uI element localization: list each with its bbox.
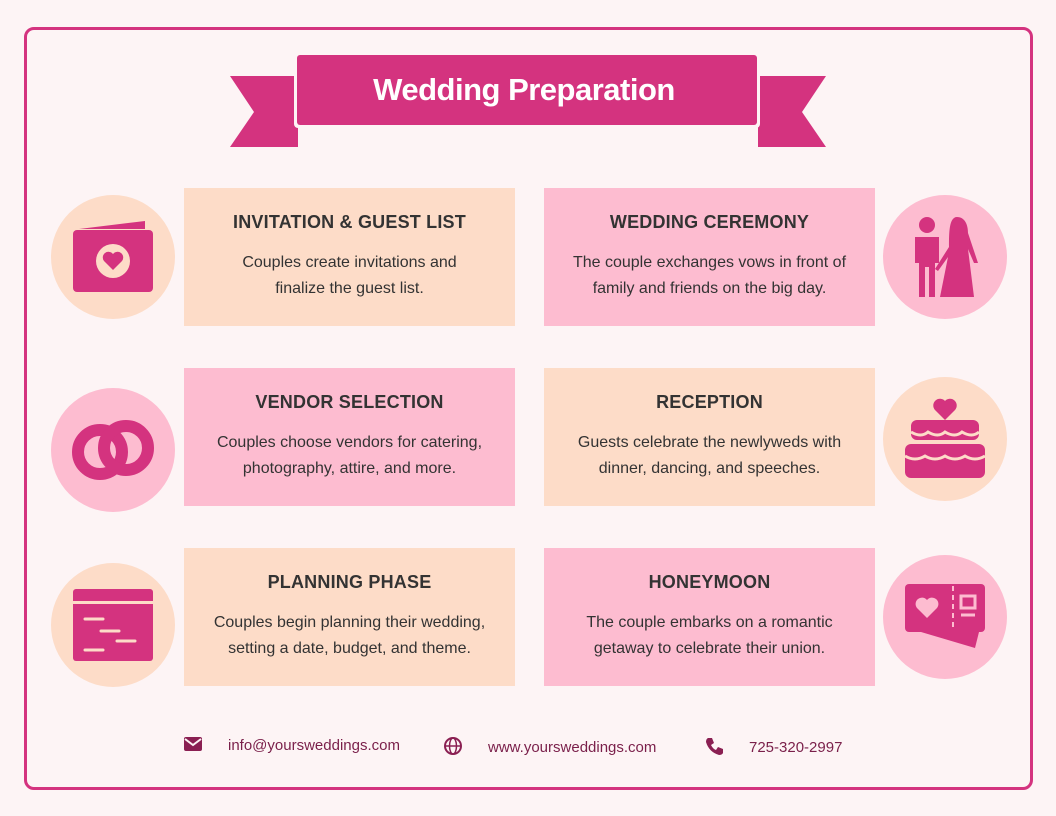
- footer: website: www.yoursweddings.com: [488, 739, 656, 756]
- icon: ticket: [883, 555, 1007, 679]
- card: reception: [544, 368, 875, 506]
- card: ceremony: WEDDING CEREMONY: [610, 212, 809, 232]
- icon: couple: [883, 195, 1007, 319]
- card: vendor: photography, attire, and more.: [243, 460, 456, 477]
- footer: phone: 725-320-2997: [749, 739, 842, 756]
- icon: cake: [883, 377, 1007, 501]
- card: planning: [184, 548, 515, 686]
- card: ceremony: The couple exchanges vows in front of: [573, 254, 846, 271]
- card: planning: PLANNING PHASE: [268, 572, 431, 592]
- icon: calendar: [51, 563, 175, 687]
- footer: email: info@yoursweddings.com: [228, 737, 400, 754]
- footer: phone: [706, 738, 842, 756]
- card: honeymoon: HONEYMOON: [649, 572, 770, 592]
- title banner: Wedding Preparation: [373, 72, 675, 107]
- card: ceremony: [544, 188, 875, 326]
- card: honeymoon: The couple embarks on a romantic: [586, 614, 833, 631]
- icon: rings: [51, 388, 175, 512]
- card: invitation: [184, 188, 515, 326]
- card: planning: Couples begin planning their wedding,: [214, 614, 485, 631]
- card: reception: Guests celebrate the newlyweds with: [578, 434, 841, 451]
- card: honeymoon: getaway to celebrate their union.: [594, 640, 825, 657]
- card: vendor: Couples choose vendors for catering,: [217, 434, 482, 451]
- card: ceremony: family and friends on the big day.: [593, 280, 826, 297]
- card: invitation: Couples create invitations and: [242, 254, 457, 271]
- card: invitation: INVITATION & GUEST LIST: [233, 212, 466, 232]
- card: planning: setting a date, budget, and theme.: [228, 640, 471, 657]
- title banner: [230, 55, 826, 147]
- card: vendor: VENDOR SELECTION: [255, 392, 444, 412]
- card: reception: dinner, dancing, and speeches.: [599, 460, 820, 477]
- card: reception: RECEPTION: [656, 392, 763, 412]
- card: honeymoon: [544, 548, 875, 686]
- card: vendor: [184, 368, 515, 506]
- icon: invitation: [51, 195, 175, 319]
- card: invitation: finalize the guest list.: [275, 280, 424, 297]
